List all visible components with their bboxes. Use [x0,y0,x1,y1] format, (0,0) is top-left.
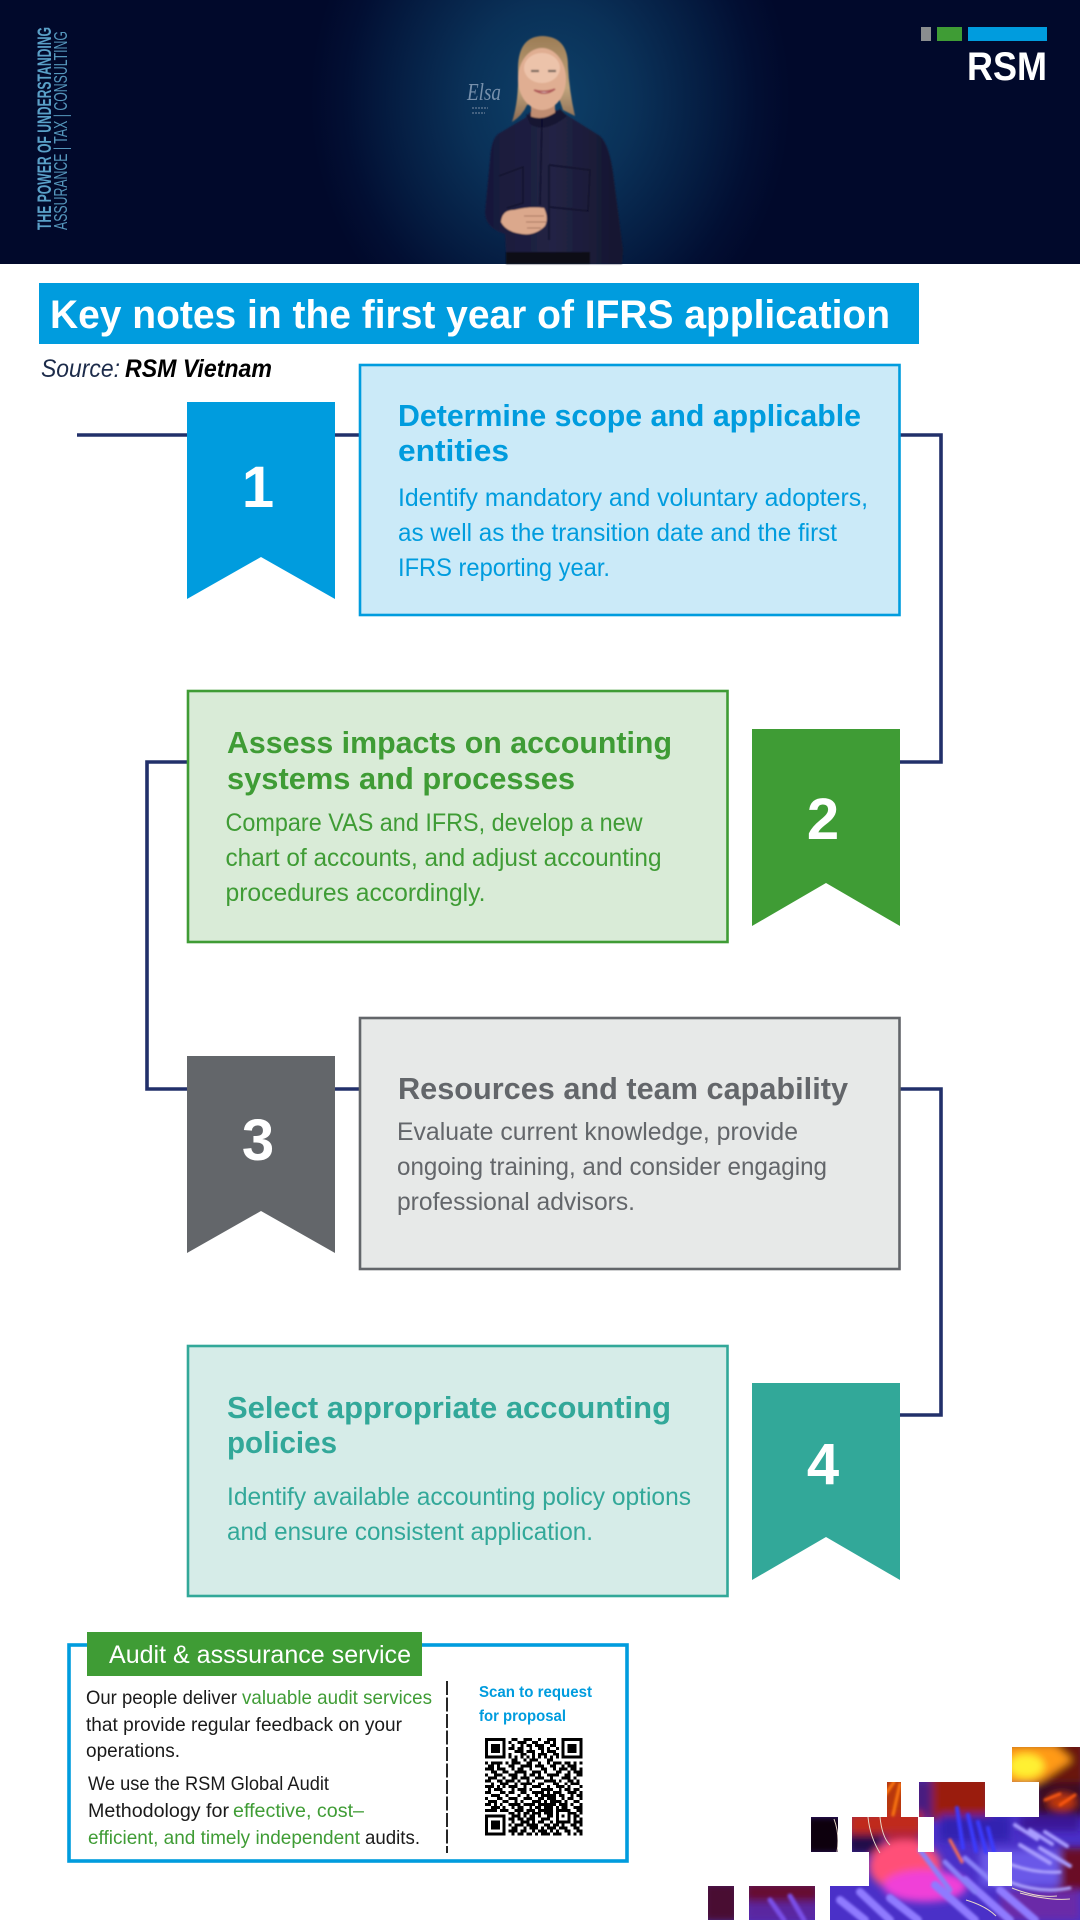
paragraph two: efficient, and timely independent [88,1827,361,1849]
step 1 heading: entities [398,433,509,468]
step 2 body: procedures accordingly. [226,879,486,907]
step 4 body: Identify available accounting policy options [227,1483,691,1511]
step 1 body [398,484,868,582]
step 2 ribbon [752,729,900,926]
step 1 heading: Determine scope and applicable [398,398,861,433]
step 2 body: chart of accounts, and adjust accounting [226,844,662,872]
dashed divider [446,1681,448,1853]
step 3 heading: Resources and team capability [398,1071,849,1106]
step 4 heading: Select appropriate accounting [227,1390,671,1425]
header banner [0,0,1080,264]
step 2 heading: systems and processes [227,761,575,796]
step 3 body: Evaluate current knowledge, provide [397,1118,798,1146]
step 4 heading [227,1390,671,1460]
paragraph one: valuable audit services [242,1687,432,1709]
step 2 body [226,809,662,907]
paragraph two: audits. [365,1827,420,1849]
step 4 ribbon: 4 [807,1432,839,1497]
paragraph one: operations. [86,1740,180,1762]
source line: RSM Vietnam [125,355,272,383]
vertical tagline [35,27,71,230]
title bar: Key notes in the first year of IFRS application [50,293,890,337]
step 4 panel [188,1346,728,1596]
step 2 heading [227,725,672,796]
step 1 ribbon [187,402,335,599]
audit service panel [69,1632,627,1861]
step 2 heading: Assess impacts on accounting [227,725,672,760]
RSM logo [921,27,1047,89]
step 4 body: and ensure consistent application. [227,1518,593,1546]
connector line [77,435,941,1415]
paragraph one: Our people deliver [86,1687,237,1709]
source line [41,355,272,383]
step 1 body: as well as the transition date and the first [398,519,837,547]
paragraph two: effective, cost– [233,1800,364,1822]
paragraph one [86,1687,432,1762]
step 1 ribbon: 1 [242,455,274,520]
step 3 body: professional advisors. [397,1188,635,1216]
scan label [479,1684,593,1725]
step 2 panel [188,691,728,942]
step 3 body [397,1118,827,1216]
step 2 body: Compare VAS and IFRS, develop a new [226,809,643,837]
scan label: for proposal [479,1708,566,1725]
photo: presenter [485,36,623,264]
RSM logo: RSM [967,45,1047,89]
source line: Source: [41,355,120,383]
step 3 panel [360,1018,900,1269]
step 2 ribbon: 2 [807,787,839,852]
step 1 body: Identify mandatory and voluntary adopters, [398,484,868,512]
step 1 body: IFRS reporting year. [398,554,610,582]
step 1 heading [398,398,861,468]
paragraph two: Methodology for [88,1800,229,1822]
QR code [485,1738,582,1835]
step 3 ribbon [187,1056,335,1253]
step 4 ribbon [752,1383,900,1580]
paragraph one: that provide regular feedback on your [86,1714,402,1736]
step 3 ribbon: 3 [242,1108,274,1173]
paragraph two: We use the RSM Global Audit [88,1773,330,1795]
step 4 body [227,1483,691,1546]
paragraph two [88,1773,420,1849]
scan label: Scan to request [479,1684,593,1701]
step 4 heading: policies [227,1425,337,1460]
signature: Elsa [466,80,501,106]
service tab [87,1632,422,1676]
signature [466,80,501,113]
service tab: Audit & asssurance service [109,1641,411,1669]
decorative mosaic image [700,1740,1080,1920]
step 3 body: ongoing training, and consider engaging [397,1153,827,1181]
step 1 panel [360,365,900,615]
